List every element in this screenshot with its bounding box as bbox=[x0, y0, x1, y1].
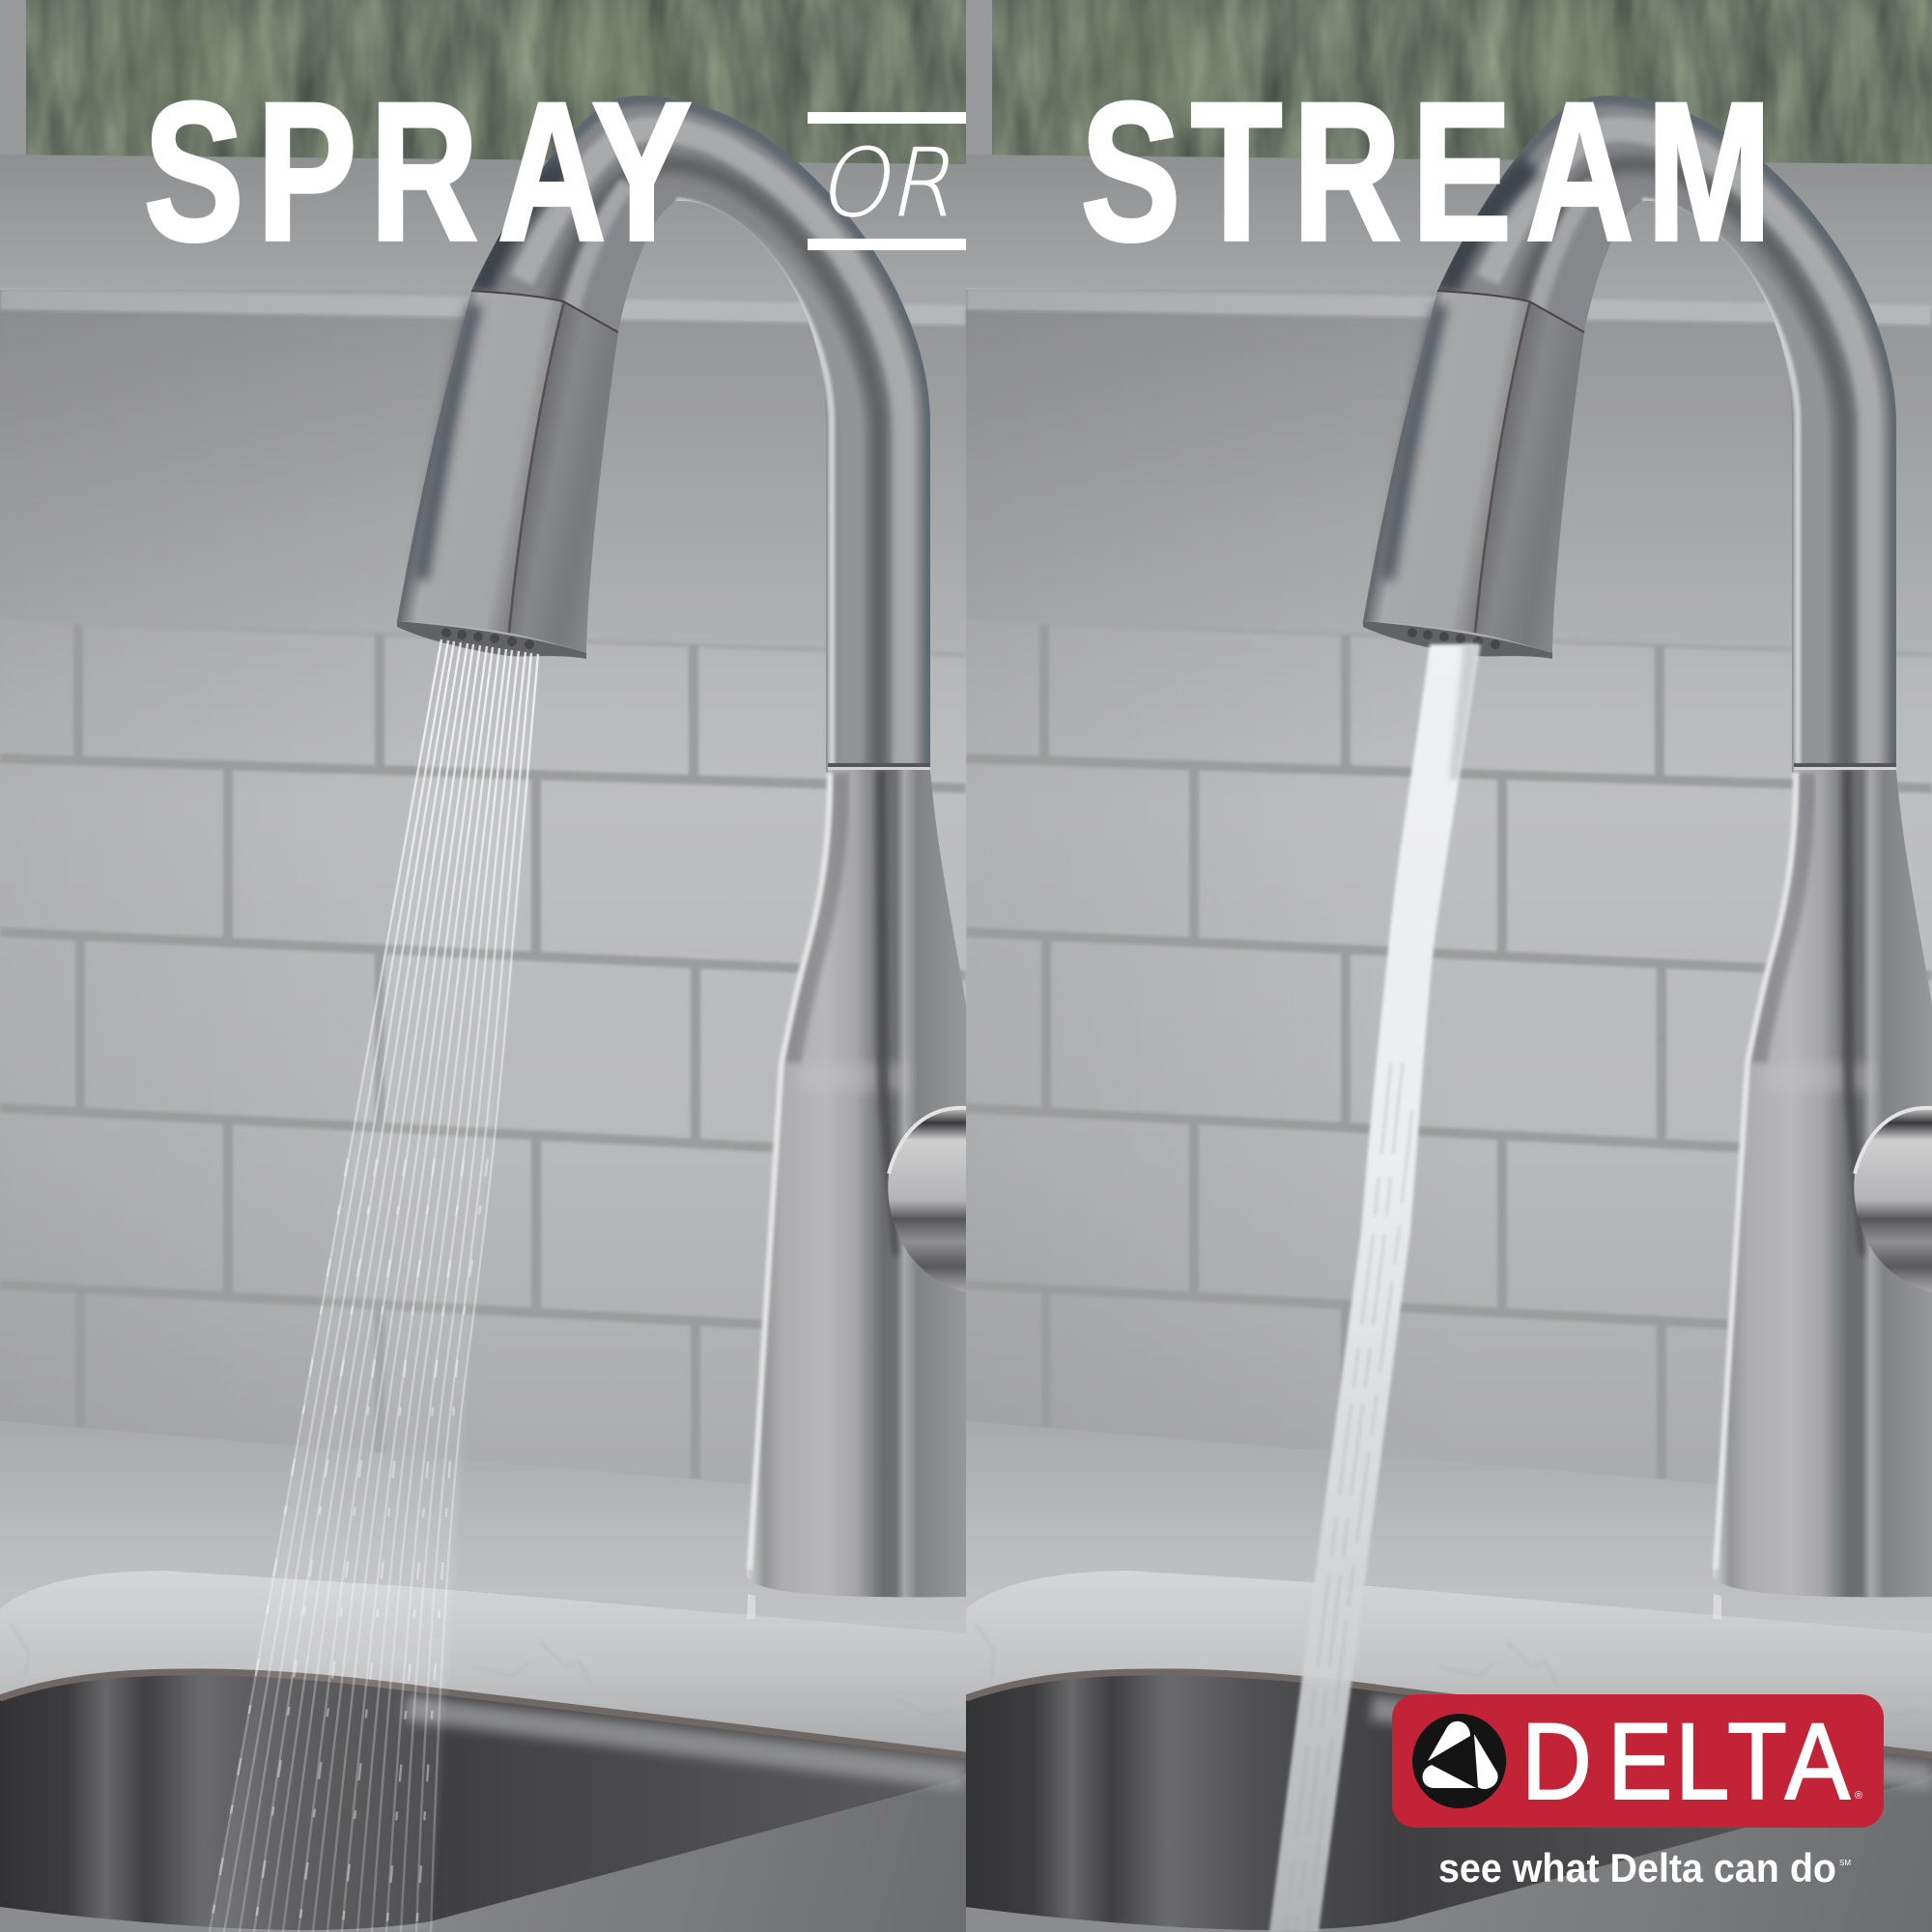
faucet bbox=[1363, 96, 1932, 1619]
registered mark: ® bbox=[1855, 1790, 1862, 1802]
counter and sink bbox=[966, 1421, 1932, 1932]
panel: spray (left half) bbox=[0, 0, 966, 1932]
title: STREAM: STREAM bbox=[1081, 62, 1772, 282]
title: SPRAY: SPRAY bbox=[144, 62, 692, 282]
logo wordmark: DELTA bbox=[1521, 1701, 1850, 1822]
tagline: see what Delta can do bbox=[1438, 1845, 1836, 1890]
water: solid stream bbox=[1269, 644, 1480, 1932]
window and tiled wall bbox=[966, 0, 1932, 1546]
water: spray jets bbox=[210, 639, 538, 1932]
logo badge bbox=[1392, 1694, 1884, 1828]
tagline: SM bbox=[1839, 1859, 1851, 1867]
icon: Delta triangle mark bbox=[1412, 1714, 1506, 1808]
faucet bbox=[397, 96, 966, 1619]
title: OR with rules: OR bbox=[812, 128, 969, 238]
panel: stream (right half) bbox=[966, 0, 1932, 1932]
logo: Delta bbox=[1392, 1694, 1884, 1828]
counter and sink bbox=[0, 1421, 966, 1932]
window and tiled wall bbox=[0, 0, 966, 1546]
